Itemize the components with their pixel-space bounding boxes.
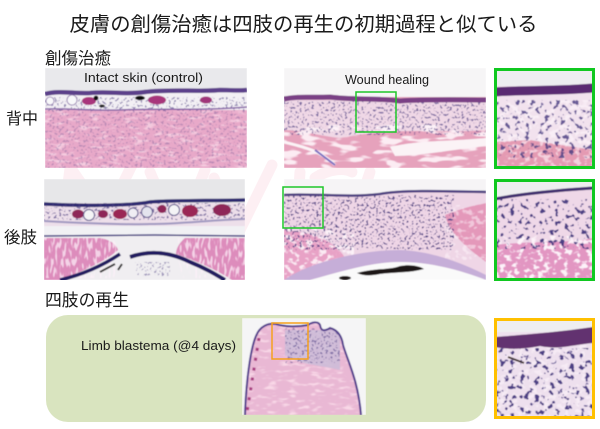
heading: wound healing: 創傷治癒 <box>45 49 111 68</box>
panel: wound healing hind limb <box>283 179 486 280</box>
inset: limb blastema <box>495 319 594 418</box>
heading: limb regeneration: 四肢の再生 <box>45 291 129 310</box>
highlight box <box>283 187 323 228</box>
title: 皮膚の創傷治癒は四肢の再生の初期過程と似ている <box>70 13 538 36</box>
inset: wound healing back <box>495 69 594 168</box>
panel: limb blastema <box>46 315 486 422</box>
panel: intact skin hind limb <box>44 179 245 280</box>
label: hind limb: 後肢 <box>4 228 37 247</box>
watermark <box>62 165 370 232</box>
inset: wound healing hind limb <box>495 180 594 280</box>
label: intact skin: Intact skin (control) <box>84 70 203 85</box>
panel: wound healing back <box>284 68 486 168</box>
micrograph: limb section <box>242 318 366 415</box>
label: limb blastema: Limb blastema (@4 days) <box>81 338 236 353</box>
label: wound healing: Wound healing <box>345 72 429 87</box>
highlight box <box>272 323 308 359</box>
highlight box <box>356 92 396 132</box>
panel: intact skin back <box>45 68 247 168</box>
label: back: 背中 <box>6 110 38 128</box>
